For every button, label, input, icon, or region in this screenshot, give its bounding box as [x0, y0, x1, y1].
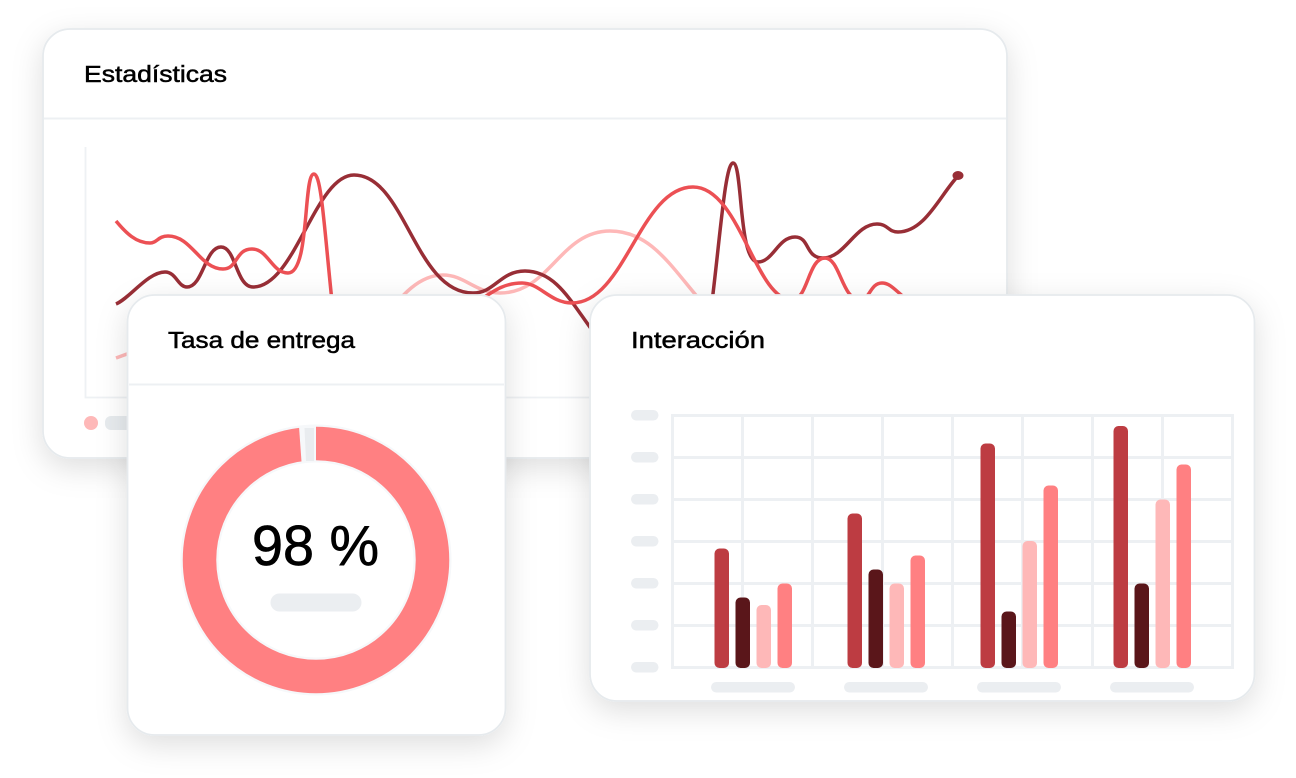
legend [84, 416, 165, 430]
value caption placeholder [270, 594, 362, 612]
panel: Interacción [590, 295, 1254, 701]
bar chart grid [671, 414, 1234, 669]
bar group 3 [980, 444, 1058, 668]
chart axes [86, 147, 1006, 398]
remainder slice [299, 426, 316, 462]
bar group 4 [1114, 426, 1191, 668]
panel: Tasa de entrega [128, 295, 506, 735]
bar group 1 [714, 548, 792, 668]
line chart [116, 163, 958, 358]
x axis labels [711, 682, 1194, 692]
line: dark series [116, 163, 958, 330]
value: 98 %: 98 % [252, 514, 379, 578]
heading: Interacción: Interacción [631, 327, 765, 353]
y axis labels [631, 410, 658, 672]
line end marker [952, 171, 964, 180]
donut chart [200, 426, 432, 676]
heading: Estadísticas: Estadísticas [84, 61, 227, 87]
heading: Tasa de entrega: Tasa de entrega [168, 327, 355, 353]
line: pink series [116, 231, 700, 358]
panel: Estadísticas [43, 29, 1007, 458]
line: red series [116, 174, 905, 320]
bar group 2 [848, 514, 925, 668]
